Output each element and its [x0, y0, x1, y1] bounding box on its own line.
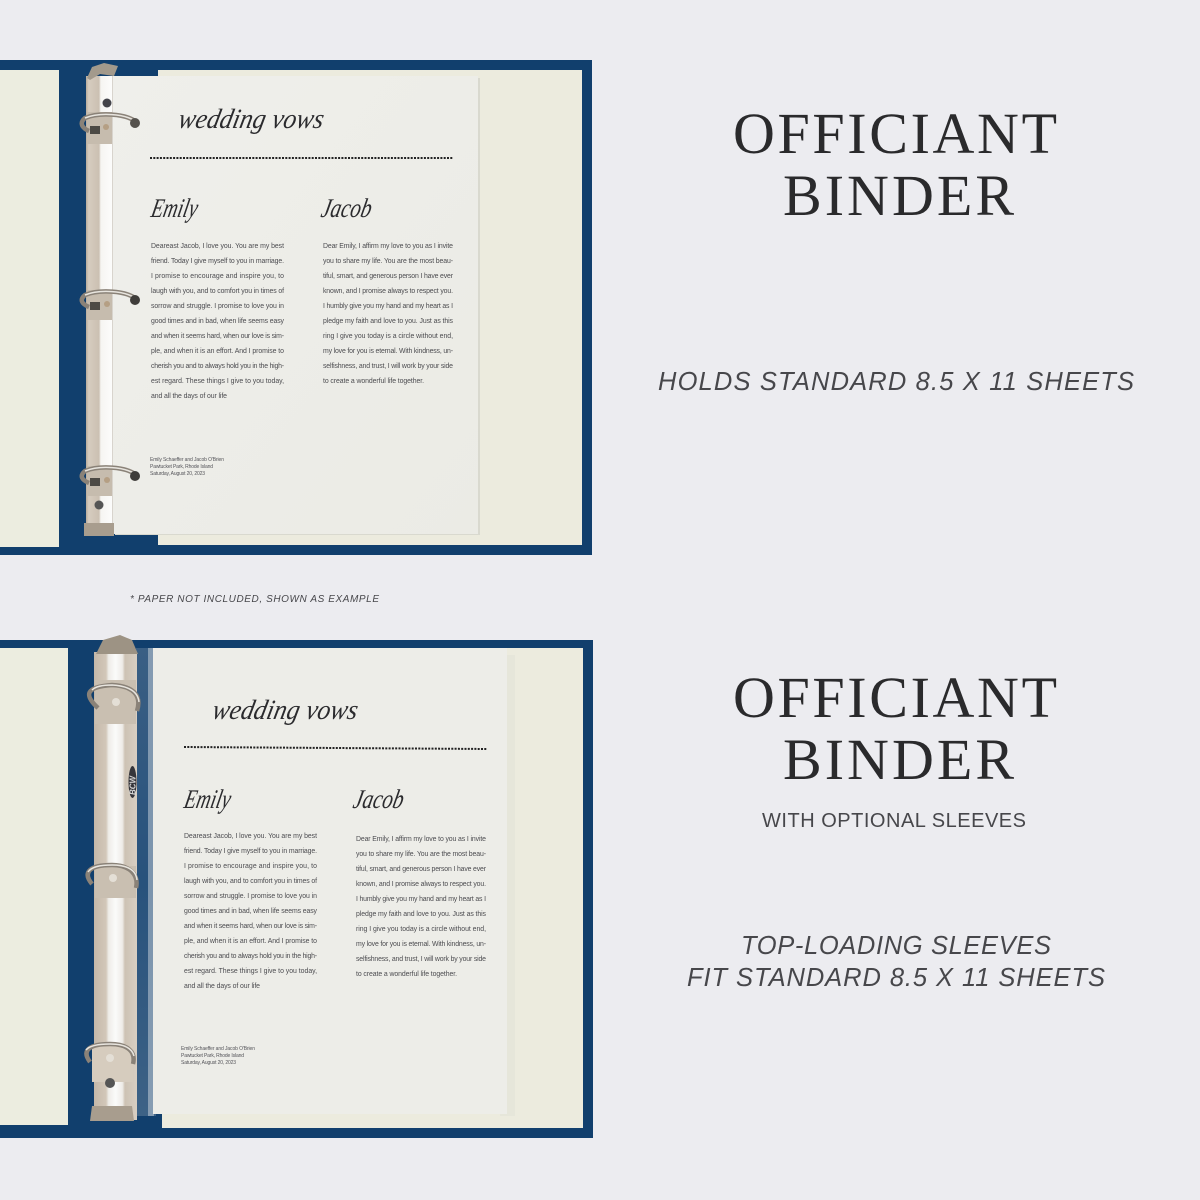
ceremony details: Pawtucket Park, Rhode Island [150, 464, 213, 470]
ceremony details [181, 1046, 255, 1066]
vows text: Emily: I promise to encourage and inspire you, to [184, 863, 317, 870]
ring: bottom [86, 1044, 134, 1064]
ceremony details: Saturday, August 20, 2023 [150, 471, 205, 477]
name: Emily: Emily [148, 193, 202, 223]
vows text: Jacob: Dear Emily, I affirm my love to you as I invite [323, 243, 453, 250]
vows text: Emily: good times and in bad, when life seems easy [151, 318, 285, 325]
vows text: Emily [184, 833, 318, 990]
vows text: Jacob: ring I give you today is a circle without end, [323, 333, 453, 340]
ring mechanism [82, 63, 140, 536]
vows text: Jacob: selfishness, and trust, I will work by your side [356, 956, 486, 963]
vows text: Jacob: my love for you is eternal. With kindness, un- [323, 348, 453, 355]
vows text: Jacob: to create a wonderful life together. [323, 378, 424, 385]
caption: top-loading sleeves: TOP-LOADING SLEEVES [741, 932, 1051, 960]
vows text: Emily: sorrow and struggle. I promise to love you in [184, 893, 317, 900]
vows text: Emily: cherish you and to always hold you in the high- [184, 953, 317, 960]
vows text: Jacob [356, 836, 487, 978]
vows text: Emily: est regard. These things I give to you today, [151, 378, 284, 385]
vows text: Jacob: you to share my life. You are the most beau- [323, 258, 453, 265]
dotted divider [150, 157, 453, 159]
binder cover [0, 640, 593, 1138]
ceremony details: Emily Schaeffer and Jacob O'Brien [181, 1046, 255, 1052]
vows text: Emily [151, 243, 285, 400]
vows text: Jacob: tiful, smart, and generous person I have ever [323, 273, 454, 280]
right cream insert [158, 70, 582, 545]
panel: bottom binder photo with sleeves [0, 635, 593, 1138]
ceremony details: Emily Schaeffer and Jacob O'Brien [150, 457, 224, 463]
vows text: Emily: cherish you and to always hold you in the high- [151, 363, 284, 370]
dotted divider [184, 747, 487, 749]
caption: top-loading sleeves: FIT STANDARD 8.5 X 11 SHEETS [687, 964, 1105, 992]
vows text: Emily: ple, and when it is an effort. And I promise to [151, 348, 284, 355]
sleeve [500, 655, 515, 1116]
panel: top binder photo [0, 60, 592, 555]
ring: top [82, 114, 140, 134]
vows text: Jacob: selfishness, and trust, I will work by your side [323, 363, 453, 370]
vows text: Emily: ple, and when it is an effort. And I promise to [184, 938, 317, 945]
vows text: Jacob: I humbly give you my hand and my heart as I [356, 896, 486, 903]
title: Officiant Binder (bottom): BINDER [783, 727, 1014, 792]
title: Officiant Binder (top) [733, 101, 1057, 228]
vows text: Emily: laugh with you, and to comfort you in times of [184, 878, 317, 885]
vows text: Emily: friend. Today I give myself to you in marriage. [151, 258, 284, 265]
vows text: Jacob [323, 243, 454, 385]
heading: wedding vows: wedding vows [210, 695, 361, 726]
paper in sleeve [153, 648, 507, 1114]
binder cover [0, 60, 592, 555]
name: Jacob: Jacob [319, 193, 375, 223]
paper sheet [113, 76, 480, 535]
vows text: Jacob: known, and I promise always to respect you. [356, 881, 486, 888]
vows text: Emily: Deareast Jacob, I love you. You are my best [151, 243, 284, 250]
vows text: Jacob: pledge my faith and love to you. Just as this [356, 911, 487, 918]
BCW logo: BCW [128, 774, 138, 795]
vows text: Emily: and when it seems hard, when our love is sim- [151, 333, 284, 340]
vows text: Jacob: Dear Emily, I affirm my love to you as I invite [356, 836, 486, 843]
title: Officiant Binder (top): OFFICIANT [733, 101, 1057, 166]
ring: middle [88, 865, 137, 888]
heading: wedding vows: wedding vows [176, 104, 327, 135]
vows text: Jacob: pledge my faith and love to you. Just as this [323, 318, 454, 325]
vows text: Emily: and all the days of our life [184, 983, 260, 990]
vows text: Jacob: to create a wonderful life together. [356, 971, 457, 978]
vows text: Emily: laugh with you, and to comfort you in times of [151, 288, 284, 295]
title: Officiant Binder (top): BINDER [783, 163, 1014, 228]
vows text: Emily: sorrow and struggle. I promise to love you in [151, 303, 284, 310]
ring: top [89, 685, 139, 711]
vows text: Emily: good times and in bad, when life seems easy [184, 908, 318, 915]
title: Officiant Binder (bottom): OFFICIANT [733, 665, 1057, 730]
left cream insert [0, 70, 59, 547]
vows text: Jacob: you to share my life. You are the most beau- [356, 851, 486, 858]
vows text: Jacob: tiful, smart, and generous person I have ever [356, 866, 487, 873]
ceremony details [150, 457, 224, 477]
vows text: Jacob: ring I give you today is a circle without end, [356, 926, 486, 933]
vows text: Jacob: I humbly give you my hand and my heart as I [323, 303, 453, 310]
vows text: Emily: and when it seems hard, when our love is sim- [184, 923, 317, 930]
vows text: Jacob: my love for you is eternal. With kindness, un- [356, 941, 486, 948]
caption: holds standard sheets: HOLDS STANDARD 8.5 X 11 SHEETS [658, 368, 1134, 396]
name: Jacob: Jacob [351, 784, 407, 814]
vows text: Emily: est regard. These things I give to you today, [184, 968, 317, 975]
ring mechanism [86, 635, 139, 1121]
right cream insert [162, 648, 583, 1128]
vows text: Emily: Deareast Jacob, I love you. You are my best [184, 833, 317, 840]
name: Emily: Emily [181, 784, 235, 814]
BCW logo [128, 766, 138, 798]
ring: bottom [82, 467, 140, 486]
title: Officiant Binder (bottom) [733, 665, 1057, 792]
left cream insert [0, 648, 68, 1125]
vows text: Emily: friend. Today I give myself to you in marriage. [184, 848, 317, 855]
ring: middle [82, 291, 140, 310]
subtitle: with optional sleeves: WITH OPTIONAL SLEEVES [762, 810, 1026, 832]
caption: top-loading sleeves [687, 932, 1105, 992]
vows text: Emily: I promise to encourage and inspire you, to [151, 273, 284, 280]
vows text: Jacob: known, and I promise always to respect you. [323, 288, 453, 295]
ceremony details: Pawtucket Park, Rhode Island [181, 1053, 244, 1059]
ceremony details: Saturday, August 20, 2023 [181, 1060, 236, 1066]
vows text: Emily: and all the days of our life [151, 393, 227, 400]
footnote: * PAPER NOT INCLUDED, SHOWN AS EXAMPLE [130, 594, 379, 605]
